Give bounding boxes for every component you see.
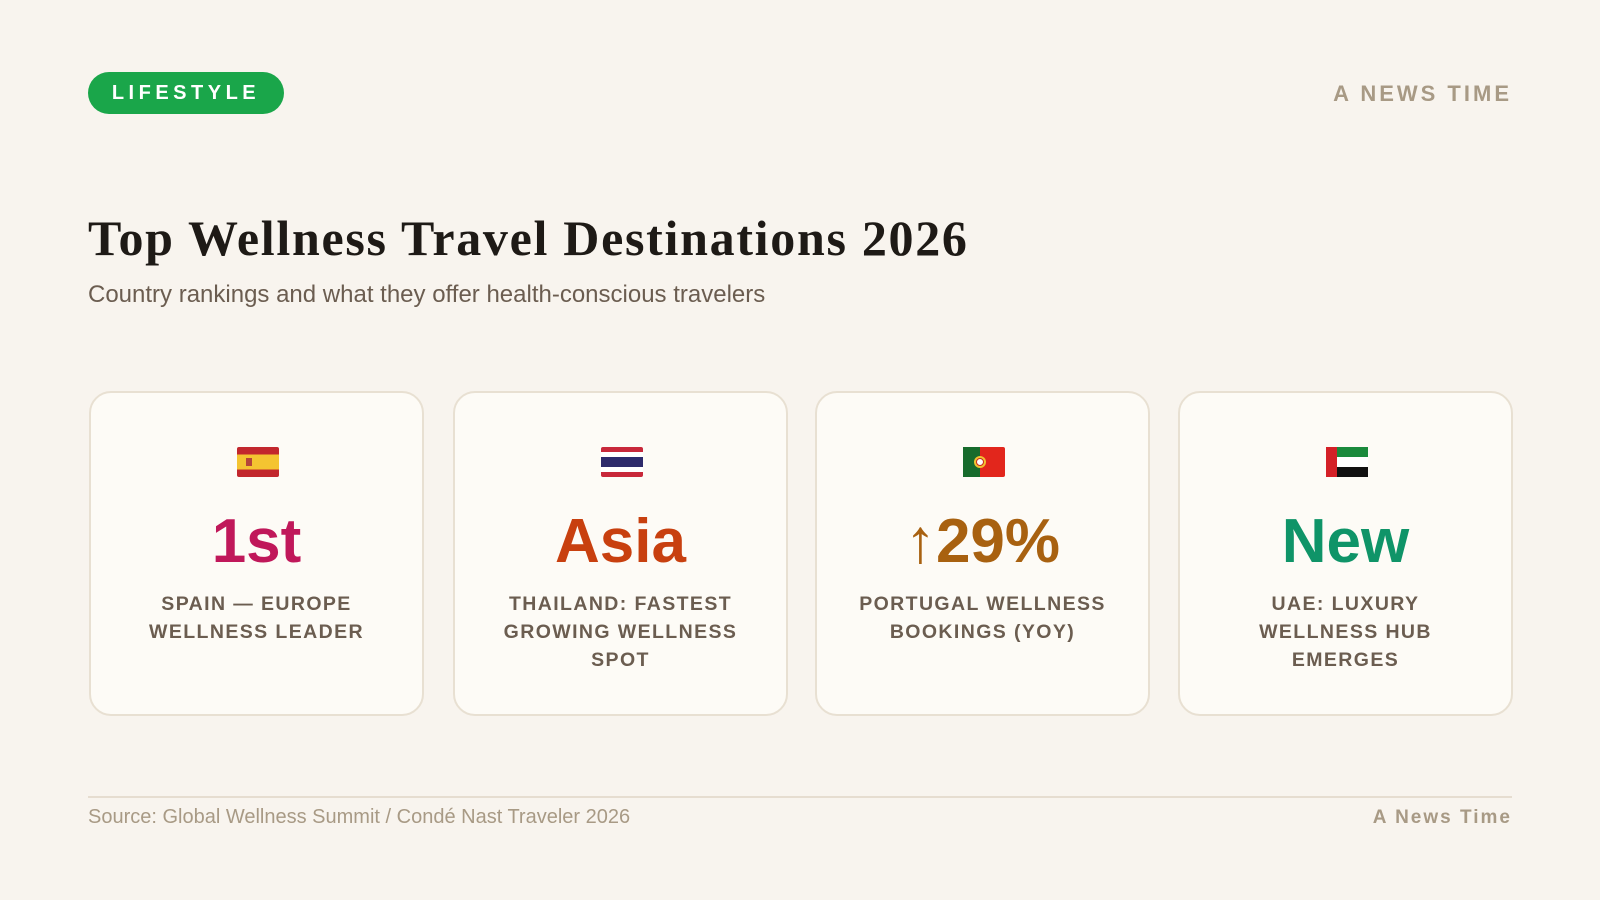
value: Asia <box>555 507 686 576</box>
icon: thailand flag <box>601 447 643 477</box>
card: thailand <box>453 391 788 716</box>
value: New <box>1282 507 1409 576</box>
tag: lifestyle <box>88 72 284 114</box>
subtitle: Country rankings and what they offer health-conscious travelers <box>88 281 765 308</box>
value: 1st <box>212 507 301 576</box>
label: PORTUGAL WELLNESS BOOKINGS (YOY) <box>859 593 1106 643</box>
label: THAILAND: FASTEST GROWING WELLNESS SPOT <box>504 593 737 671</box>
title: Top Wellness Travel Destinations 2026 <box>88 210 969 266</box>
card: uae <box>1178 391 1513 716</box>
icon: spain flag <box>237 447 279 477</box>
value: ↑29% <box>905 507 1060 576</box>
label: SPAIN — EUROPE WELLNESS LEADER <box>149 593 364 643</box>
tag: lifestyle: LIFESTYLE <box>112 82 260 104</box>
icon: uae flag <box>1326 447 1368 477</box>
source: Source: Global Wellness Summit / Condé Nast Traveler 2026 <box>88 806 630 828</box>
icon: portugal flag <box>963 447 1005 477</box>
card: portugal <box>815 391 1150 716</box>
brand: A NEWS TIME <box>1333 81 1512 106</box>
label: UAE: LUXURY WELLNESS HUB EMERGES <box>1259 593 1432 671</box>
footer brand: A News Time <box>1373 807 1512 828</box>
card: spain <box>89 391 424 716</box>
